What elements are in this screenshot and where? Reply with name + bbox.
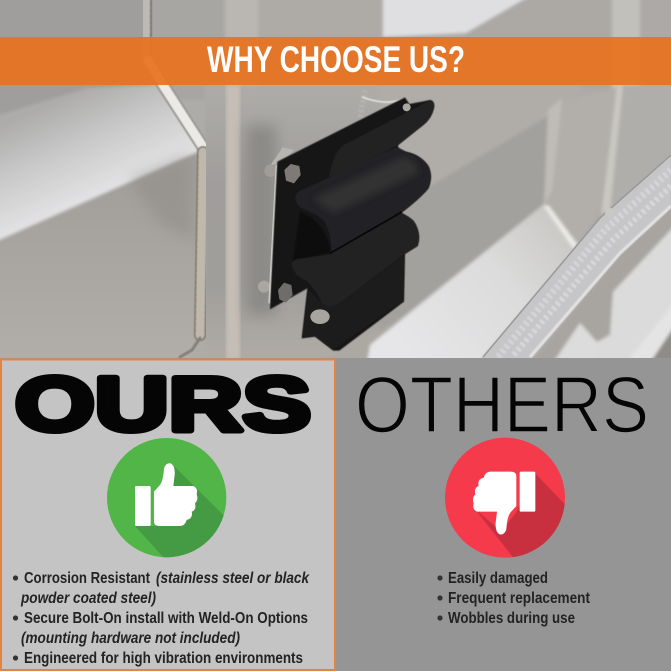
back bolt at top xyxy=(403,103,411,111)
bullet list: ours: Corrosion Resistant xyxy=(24,570,151,587)
panel: others xyxy=(359,377,646,626)
black bolt-on bracket xyxy=(258,97,434,351)
panel: ours xyxy=(1,360,335,670)
area beneath rail xyxy=(539,212,671,358)
title: WHY CHOOSE US? xyxy=(207,39,465,80)
bullet list: others: Wobbles during use xyxy=(448,610,575,627)
small weld seam at top of bracket xyxy=(358,96,403,117)
bullet list: ours: (stainless steel or black xyxy=(156,570,310,587)
bullet list: ours: powder coated steel) xyxy=(20,590,156,607)
pin xyxy=(310,309,330,324)
bright lower panel xyxy=(366,205,575,358)
icon: thumbs down xyxy=(445,438,565,558)
bullet list: ours: Engineered for high vibration environments xyxy=(24,650,303,667)
bullet list: others: Easily damaged xyxy=(448,570,548,587)
shadow on column xyxy=(246,125,276,315)
upper clamp highlight xyxy=(318,158,416,212)
top flap xyxy=(329,101,434,182)
soft shading on the left block xyxy=(130,155,195,240)
bullet list: others xyxy=(437,570,591,627)
rear weld tab and bolts xyxy=(258,147,294,303)
right panel xyxy=(610,85,640,205)
upper panel behind bracket xyxy=(380,85,583,215)
bullet list: others: Frequent replacement xyxy=(448,590,591,607)
tab xyxy=(302,269,404,350)
front hex bolts xyxy=(278,164,301,303)
bullet list: ours: Secure Bolt-On install with Weld-On Options xyxy=(24,610,308,627)
white ridge xyxy=(543,205,578,248)
icon: thumbs up xyxy=(107,438,226,558)
bullet list: ours: (mounting hardware not included) xyxy=(21,630,240,647)
lower-left block xyxy=(0,100,40,114)
vertical panel xyxy=(612,89,616,98)
bracket silhouette xyxy=(270,97,434,351)
white panel lower right xyxy=(596,227,671,358)
column xyxy=(205,85,385,370)
upper curved clamp xyxy=(295,147,431,253)
fold lines xyxy=(330,212,402,253)
photo: stainless steel truck box with bracket xyxy=(0,0,671,370)
header banner xyxy=(0,37,671,85)
textured rail xyxy=(480,155,671,360)
bullet list: ours xyxy=(13,570,310,667)
heading: ours: OURS xyxy=(15,362,311,448)
lower curved clamp xyxy=(292,213,419,306)
weld seam xyxy=(146,0,203,357)
clamp valley shadow xyxy=(293,212,331,261)
light vertical strip on column xyxy=(226,85,240,360)
steel surfaces background xyxy=(0,0,671,370)
